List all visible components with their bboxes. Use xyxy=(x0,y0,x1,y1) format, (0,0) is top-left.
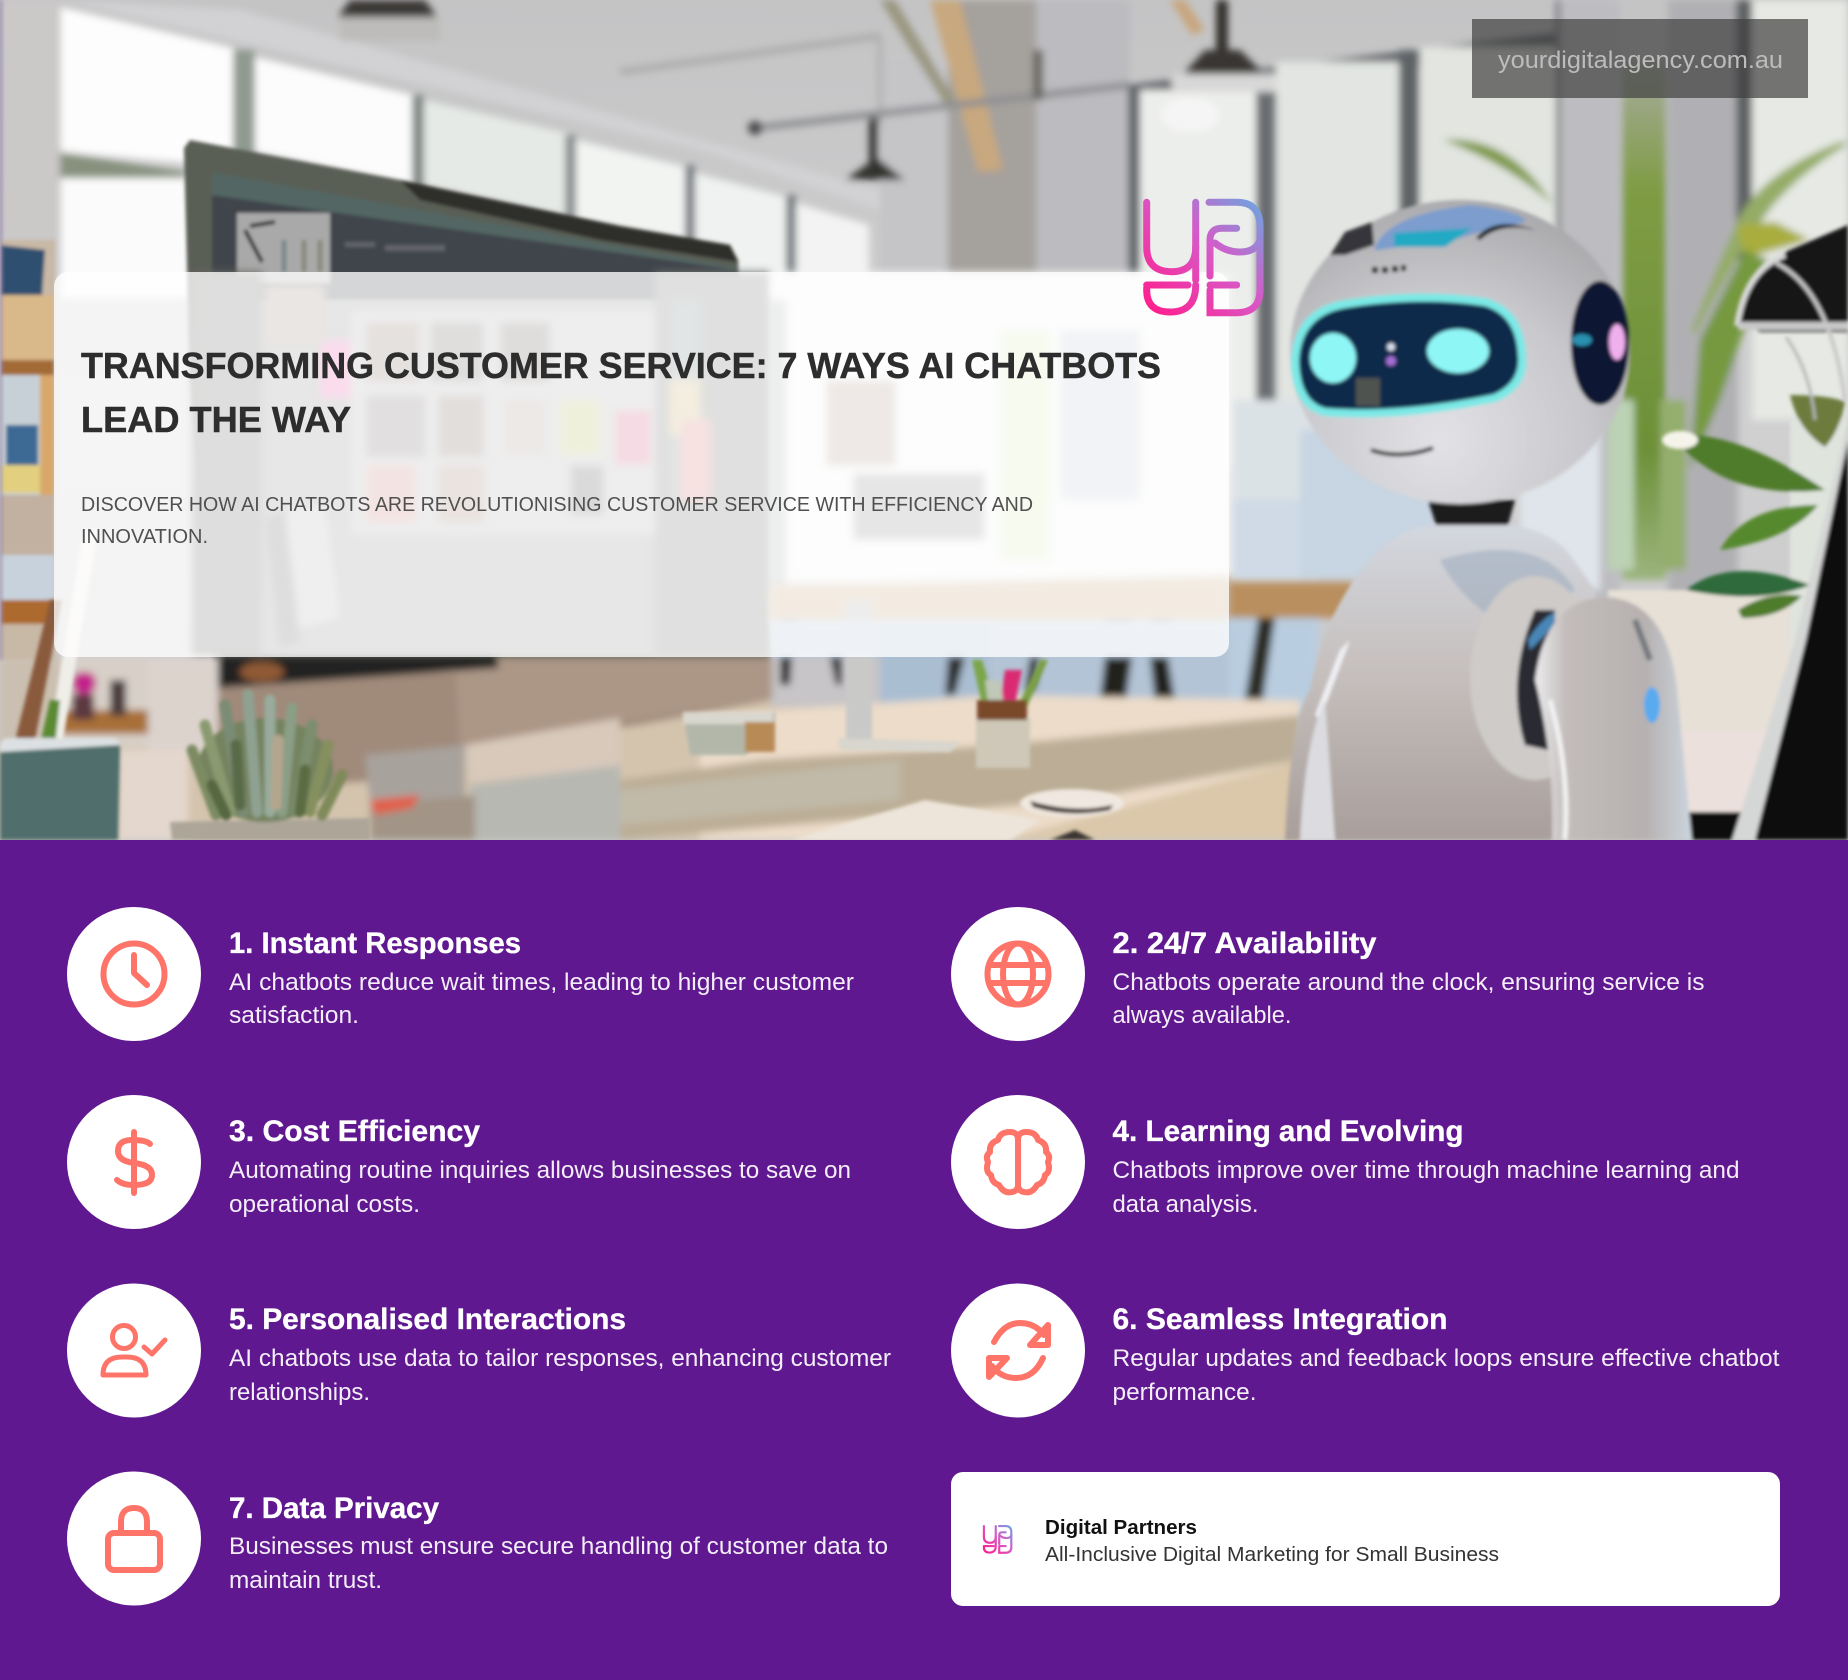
robot body xyxy=(1285,525,1600,840)
behind panel: desk and windows xyxy=(770,272,1232,660)
desk surface xyxy=(700,695,1300,840)
purple content section xyxy=(0,840,1848,1680)
item 1: instant responses xyxy=(67,907,854,1041)
heading xyxy=(81,345,1161,440)
desk corner xyxy=(0,657,60,747)
robot ear xyxy=(1571,281,1629,405)
url tag xyxy=(1472,19,1808,98)
item 3: cost efficiency: operational costs. xyxy=(229,1191,420,1218)
item 7: data privacy xyxy=(67,1472,888,1606)
left side shelf xyxy=(58,657,150,749)
monitor base xyxy=(214,665,742,786)
screen thumbnails under panel xyxy=(192,272,770,657)
item 2: availability: 2. 24/7 Availability xyxy=(1112,927,1377,960)
item 1: instant responses: 1. Instant Responses xyxy=(229,927,521,960)
item 7: data privacy: 7. Data Privacy xyxy=(229,1492,439,1525)
partner card: Digital Partners xyxy=(1045,1517,1197,1539)
item 2: availability xyxy=(951,907,1704,1041)
item 6: integration: performance. xyxy=(1112,1379,1256,1406)
lower right window band xyxy=(1232,394,1312,502)
subtitle: INNOVATION. xyxy=(81,526,208,548)
pipes and lamps xyxy=(620,36,880,72)
lamp right xyxy=(1216,0,1228,55)
robot xyxy=(1285,200,1848,840)
desk, shelves and objects xyxy=(0,582,1354,840)
heading: LEAD THE WAY xyxy=(81,399,351,440)
sensor dots xyxy=(1372,265,1406,273)
title panel xyxy=(54,272,1229,657)
succulent plant in pot xyxy=(170,695,370,840)
right windows xyxy=(1128,33,1555,100)
head dome xyxy=(1330,222,1374,255)
icon: brain xyxy=(987,1132,1049,1192)
icon: clock xyxy=(104,944,164,1004)
icon: refresh arrows xyxy=(989,1323,1048,1378)
subtitle xyxy=(81,494,1033,548)
item 5: personalised xyxy=(67,1284,891,1418)
item 6: integration: 6. Seamless Integration xyxy=(1112,1303,1448,1336)
visor xyxy=(1295,297,1522,413)
pencils and teal cup xyxy=(0,598,123,840)
item 7: data privacy: maintain trust. xyxy=(229,1567,382,1594)
item 5: personalised: relationships. xyxy=(229,1379,370,1406)
item 3: cost efficiency xyxy=(67,1095,851,1229)
robot arm xyxy=(1535,597,1692,840)
item 3: cost efficiency: 3. Cost Efficiency xyxy=(229,1115,480,1148)
plant stems and leaves xyxy=(1622,60,1666,580)
partner card xyxy=(951,1472,1780,1606)
item 4: learning xyxy=(951,1095,1740,1229)
hero photo: office with robot xyxy=(0,0,1848,840)
url tag: yourdigitalagency.com.au xyxy=(1498,47,1783,74)
icon: dollar xyxy=(117,1132,152,1193)
right plant pot and table xyxy=(1608,395,1848,840)
icon: user check xyxy=(103,1326,165,1375)
shoulder disc xyxy=(1470,575,1570,781)
logo small xyxy=(984,1526,1011,1553)
item 5: personalised: AI chatbots use data to tailor responses, enhancing customer xyxy=(229,1345,891,1372)
item 4: learning: 4. Learning and Evolving xyxy=(1112,1115,1464,1148)
black object top right xyxy=(1732,225,1848,840)
item 6: integration xyxy=(951,1284,1780,1418)
item 3: cost efficiency: Automating routine inquiries allows businesses to save on xyxy=(229,1157,851,1184)
neck xyxy=(1428,500,1515,525)
mouth xyxy=(1371,448,1433,455)
floor and wall behind desk xyxy=(766,618,1232,702)
desk objects: book stack, pole, pencil cup, mouse xyxy=(683,657,1124,840)
left shelf books xyxy=(0,0,55,660)
subtitle: DISCOVER HOW AI CHATBOTS ARE REVOLUTIONISING CUSTOMER SERVICE WITH EFFICIENCY AND xyxy=(81,494,1033,516)
item 4: learning: Chatbots improve over time through machine learning and xyxy=(1112,1157,1740,1184)
item 5: personalised: 5. Personalised Interactions xyxy=(229,1303,626,1336)
icon: lock xyxy=(108,1508,160,1570)
background office: windows, ceiling, lamps xyxy=(0,0,1848,600)
visor eyes xyxy=(1310,333,1356,383)
item 2: availability: Chatbots operate around the clock, ensuring service is xyxy=(1112,969,1704,996)
logo large xyxy=(1147,202,1260,313)
item 6: integration: Regular updates and feedback loops ensure effective chatbot xyxy=(1112,1345,1780,1372)
heading: TRANSFORMING CUSTOMER SERVICE: 7 WAYS AI CHATBOTS xyxy=(81,345,1161,386)
monitor and screen xyxy=(184,140,1232,690)
wall and pillar xyxy=(874,126,904,184)
partner card: All-Inclusive Digital Marketing for Small Business xyxy=(1045,1544,1499,1566)
item 1: instant responses: satisfaction. xyxy=(229,1002,359,1029)
item 1: instant responses: AI chatbots reduce wait times, leading to higher customer xyxy=(229,969,854,996)
item 2: availability: always available. xyxy=(1112,1002,1292,1029)
item 4: learning: data analysis. xyxy=(1112,1191,1258,1218)
icon: globe xyxy=(988,944,1048,1004)
item 7: data privacy: Businesses must ensure secure handling of customer data to xyxy=(229,1533,888,1560)
head xyxy=(1290,200,1630,504)
